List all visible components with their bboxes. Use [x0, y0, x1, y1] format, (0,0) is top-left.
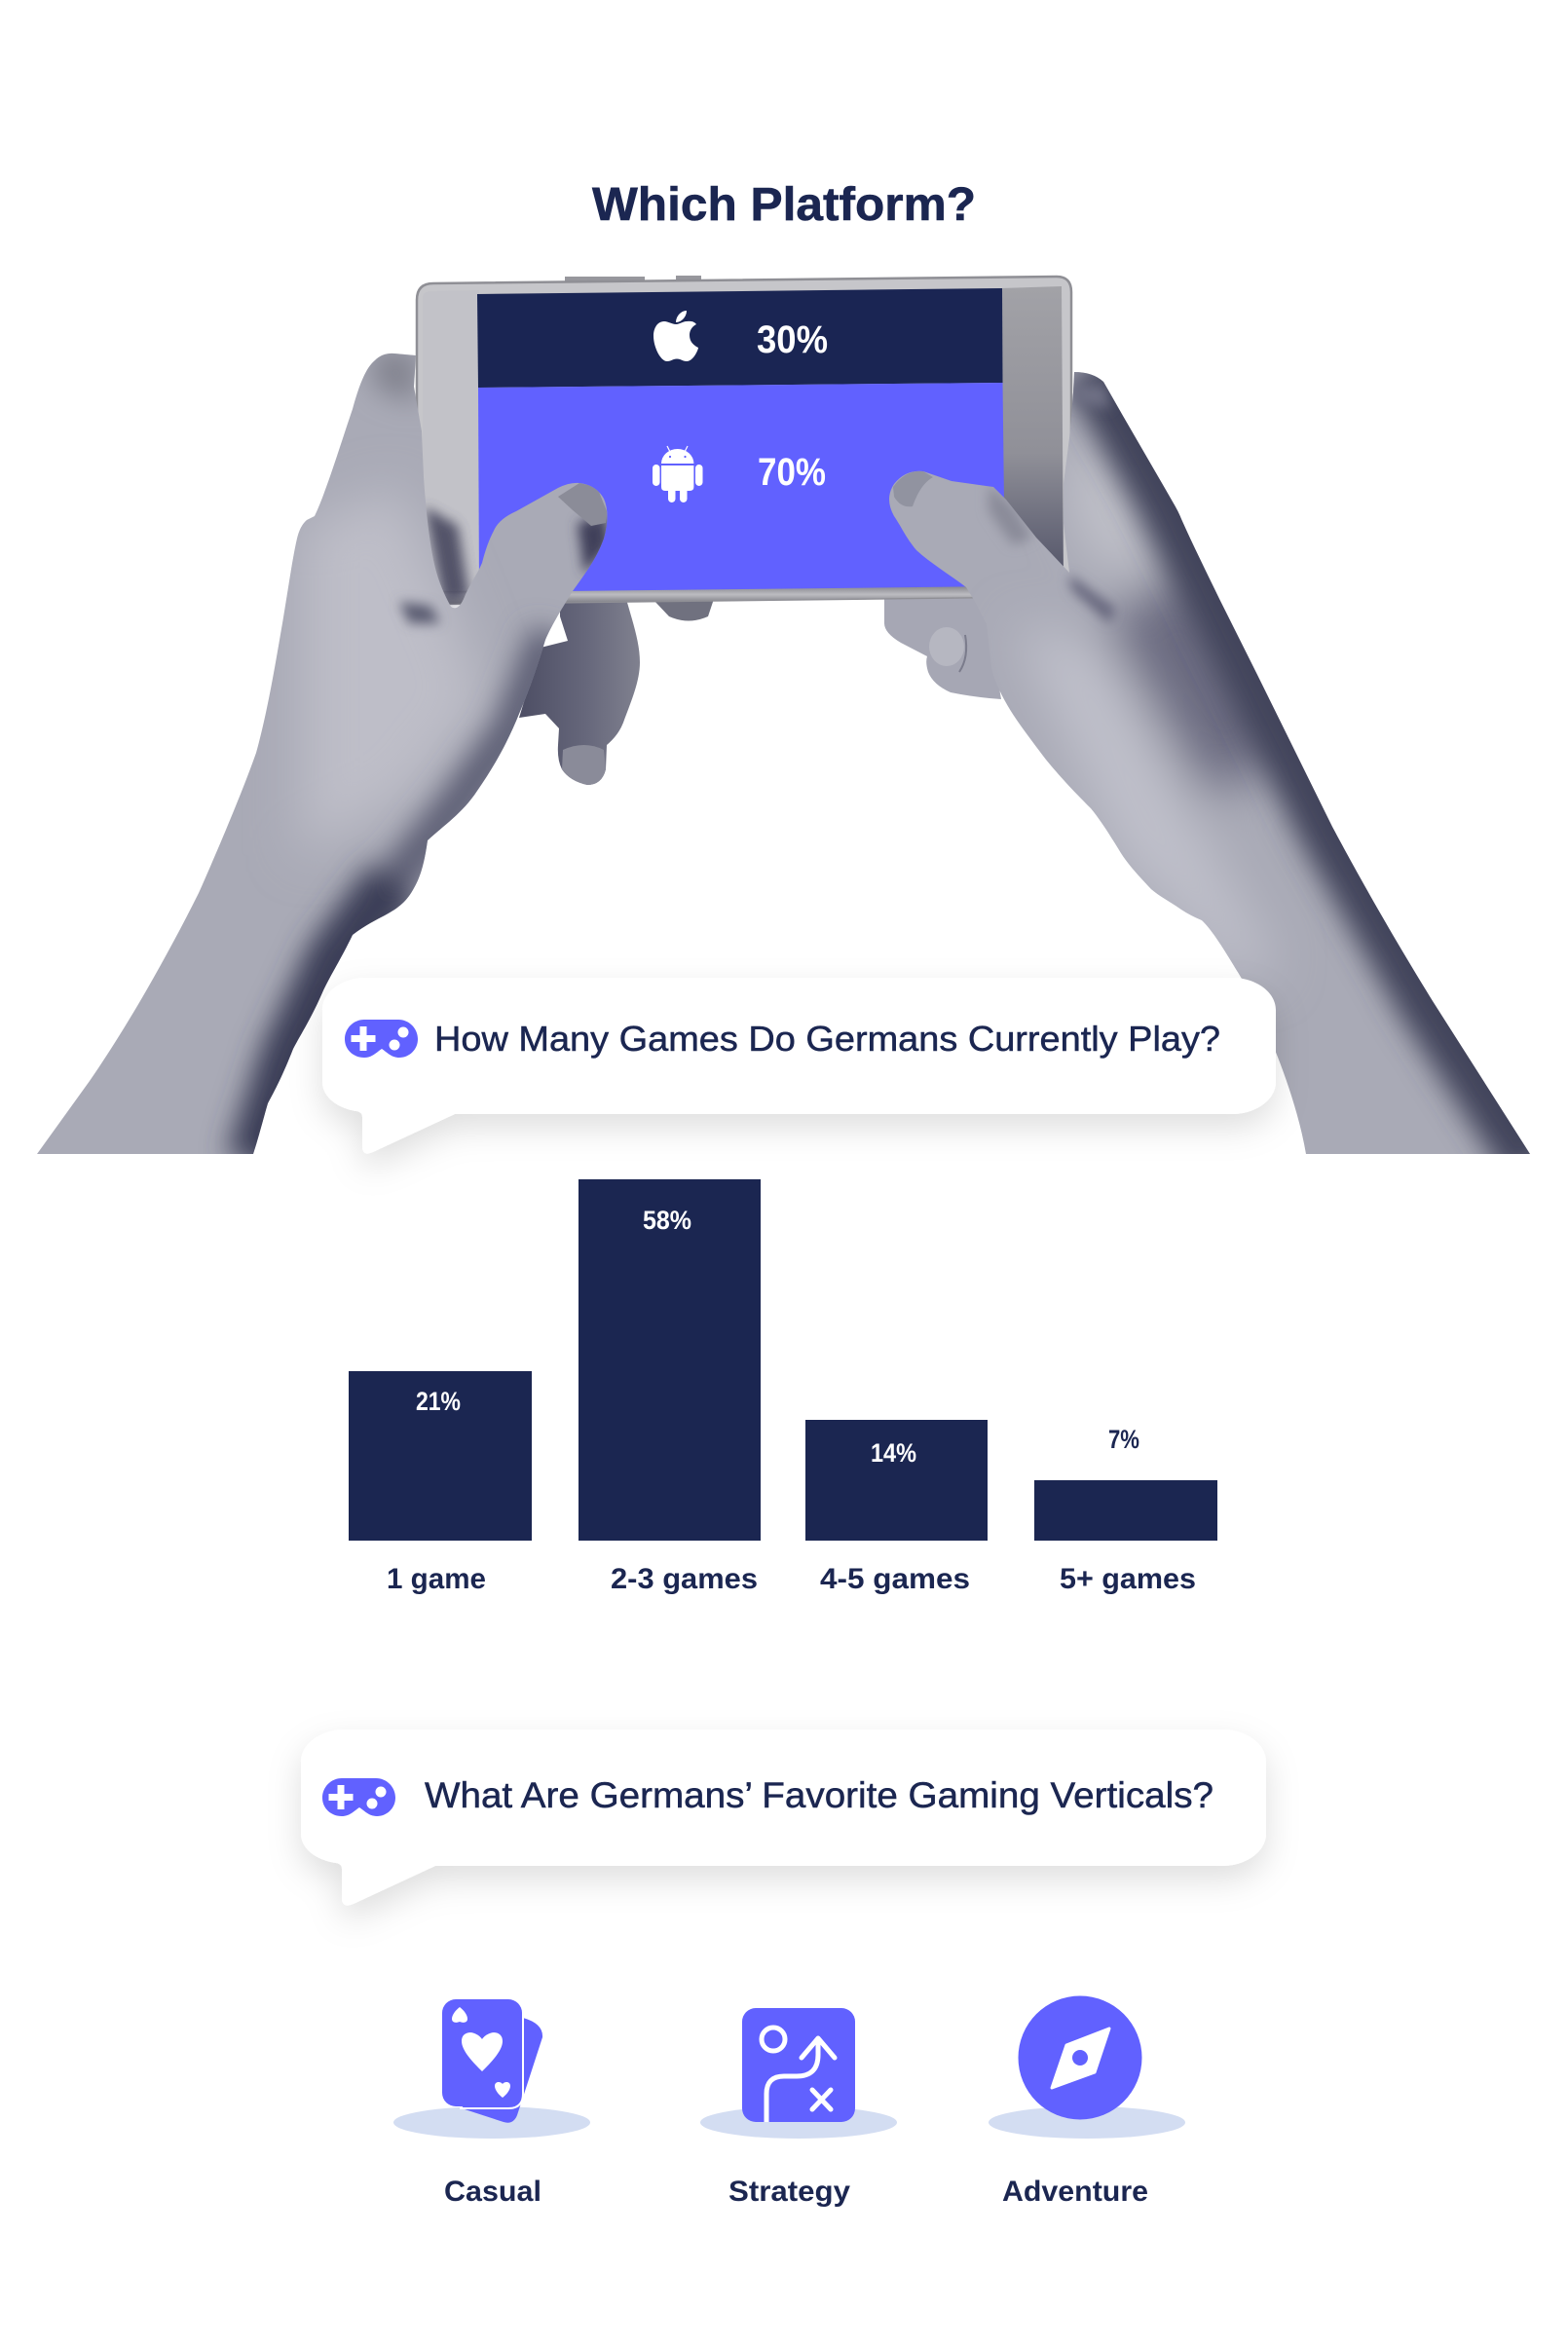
phone buttons — [565, 276, 701, 282]
shadow ellipse — [393, 2106, 590, 2139]
iOS percentage: 30% — [757, 318, 828, 361]
phone left bezel — [423, 290, 479, 596]
icon: apple — [653, 311, 698, 361]
value 14%: 14% — [871, 1438, 916, 1468]
left hand broad tones — [302, 419, 1276, 984]
vertical: strategy — [700, 2008, 897, 2208]
label: Casual — [444, 2176, 541, 2208]
bar 5+ games — [1034, 1480, 1217, 1541]
shadow on the left bezel — [425, 506, 469, 604]
icon: compass — [1019, 1996, 1141, 2119]
icon: strategy board — [742, 2008, 855, 2122]
phone right bezel — [1001, 286, 1064, 589]
title: Which Platform? — [592, 179, 976, 231]
screen bottom: Android share — [478, 383, 1005, 592]
speech bubble: how many games — [322, 978, 1276, 1154]
vertical: casual — [393, 1999, 590, 2208]
left knuckle top — [370, 351, 419, 404]
axis labels: 4-5 games — [820, 1563, 970, 1595]
bubble heading: How Many Games Do Germans Currently Play? — [434, 1019, 1220, 1059]
value 21%: 21% — [416, 1387, 461, 1416]
thumb and crease details — [578, 514, 610, 575]
bar 4-5 games — [805, 1420, 988, 1541]
label: Adventure — [1002, 2176, 1148, 2208]
shadow ellipse — [700, 2106, 897, 2139]
value 58%: 58% — [643, 1206, 691, 1235]
phone bottom rim — [429, 585, 1071, 604]
bar chart: games played — [349, 1179, 1217, 1595]
right thumb nail — [893, 471, 933, 506]
vertical: adventure — [989, 1996, 1185, 2208]
shadow ellipse — [989, 2106, 1185, 2139]
Android percentage: 70% — [758, 451, 826, 494]
axis labels — [387, 1563, 1196, 1595]
bubble heading: What Are Germans’ Favorite Gaming Verticals? — [425, 1775, 1213, 1815]
bar 2-3 games — [579, 1179, 761, 1541]
fingers behind the phone — [519, 596, 1001, 785]
axis labels: 1 game — [387, 1563, 486, 1595]
left thumb nail — [558, 483, 607, 526]
icon: android — [653, 446, 703, 502]
phone body — [417, 277, 1071, 604]
icon: gamepad — [322, 1778, 395, 1816]
screen top: iOS share — [477, 288, 1003, 388]
icon: playing cards — [442, 1999, 542, 2123]
axis labels: 5+ games — [1060, 1563, 1196, 1595]
axis labels: 2-3 games — [611, 1563, 758, 1595]
speech bubble: favorite verticals — [301, 1730, 1266, 1906]
icon: gamepad — [345, 1020, 418, 1058]
hands holding the phone — [0, 331, 1568, 1169]
bar 1 game — [349, 1371, 532, 1541]
label: Strategy — [728, 2176, 850, 2208]
value 7%: 7% — [1108, 1425, 1139, 1454]
phone — [417, 276, 1071, 604]
left arm inner dark band — [255, 881, 394, 1164]
right arm outer dark band — [1096, 365, 1539, 1164]
